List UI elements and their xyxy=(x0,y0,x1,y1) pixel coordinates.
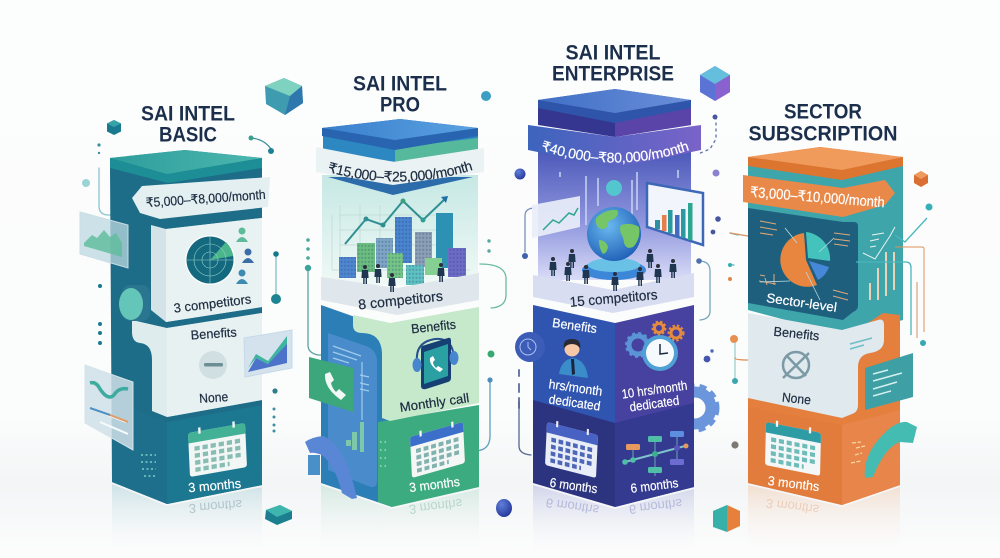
icon: calendar xyxy=(765,419,821,476)
benefits block right face xyxy=(615,305,694,423)
duration labels xyxy=(549,475,680,496)
reflections on floor: 3 months xyxy=(765,496,820,517)
outer trend line xyxy=(895,218,927,242)
monthly call label: Monthly call xyxy=(399,390,470,415)
icon: pie chart xyxy=(780,232,830,287)
lid front xyxy=(322,119,478,150)
reflections on floor xyxy=(112,484,900,558)
hours label right xyxy=(621,378,688,414)
growth line xyxy=(345,196,448,244)
lid lower layer right xyxy=(615,108,691,137)
lid top xyxy=(748,147,903,170)
platform xyxy=(321,273,479,315)
icon: radar xyxy=(185,235,235,285)
column: SAI Intel Enterprise xyxy=(515,89,704,507)
title: Sector Subscription xyxy=(748,100,898,146)
benefits panel xyxy=(748,313,884,418)
dark panel xyxy=(748,208,858,320)
lid front xyxy=(538,89,691,123)
icon: competitor people xyxy=(236,228,254,284)
panel annotations xyxy=(759,221,850,300)
column: SAI Intel Pro xyxy=(305,119,484,507)
hours label left: dedicated xyxy=(548,391,601,414)
price ribbon xyxy=(132,177,270,219)
benefits label: Benefits xyxy=(190,324,238,343)
title: SAI Intel Enterprise: ENTERPRISE xyxy=(552,62,674,86)
bottom block xyxy=(378,405,479,507)
panel connectors xyxy=(760,228,834,300)
price text: ₹5,000–₹8,000/month xyxy=(145,187,266,210)
upper glass body xyxy=(322,175,478,285)
title: SAI Intel Pro xyxy=(353,72,447,116)
icon: calendar xyxy=(545,419,598,478)
title: SAI Intel Basic xyxy=(141,102,235,146)
icon: gears and clock xyxy=(626,322,684,371)
teal side notes xyxy=(850,338,872,349)
sector level label: Sector-level xyxy=(765,290,838,315)
icon: circled x xyxy=(783,352,809,378)
title: SAI Intel Pro: SAI INTEL xyxy=(353,72,447,96)
icon: calendar xyxy=(188,419,247,477)
benefits block left face xyxy=(533,305,615,423)
teal arc xyxy=(865,422,917,478)
chart grid xyxy=(332,205,470,270)
icon: none minus xyxy=(199,351,227,379)
price text: ₹40,000–₹80,000/month xyxy=(542,140,689,164)
right face trend line xyxy=(863,227,895,259)
benefits label: Benefits xyxy=(773,324,821,343)
data streams xyxy=(560,170,678,225)
title: SAI Intel Basic: BASIC xyxy=(159,124,217,146)
side dash notes xyxy=(851,442,865,463)
title: SAI Intel Pro: PRO xyxy=(380,94,420,116)
competitors panel xyxy=(151,218,262,322)
benefits label: Benefits xyxy=(551,315,598,336)
price text: ₹15,000–₹25,000/month xyxy=(329,162,472,184)
reflections on floor: 6 months xyxy=(628,496,683,517)
column: Sector Subscription xyxy=(743,147,932,505)
price ribbon xyxy=(316,147,484,185)
duration label: 3 months xyxy=(408,474,461,495)
competitors label: 8 competitors xyxy=(357,288,444,312)
right face bars xyxy=(870,252,894,300)
cylinder knob xyxy=(119,285,150,321)
people xyxy=(361,263,445,292)
bar chart card xyxy=(647,183,703,245)
icon: calendar xyxy=(410,419,465,478)
benefits panel xyxy=(353,307,479,421)
orange lower body xyxy=(748,313,900,505)
floating circle xyxy=(606,180,622,196)
benefits label: Benefits xyxy=(410,317,457,336)
orange right face shade xyxy=(842,410,900,505)
title: SAI Intel Enterprise xyxy=(552,42,674,86)
hours label left xyxy=(548,376,603,414)
bottom orange block xyxy=(748,407,842,505)
hours label right: 10 hrs/month xyxy=(621,378,688,402)
lid front xyxy=(748,147,903,180)
left blue panel xyxy=(321,305,392,507)
buildings xyxy=(339,213,466,285)
benefits panel right face xyxy=(167,313,262,417)
green phone card xyxy=(309,357,353,412)
reflections on floor: 3 months xyxy=(408,496,463,517)
title: SAI Intel Basic: SAI INTEL xyxy=(141,102,235,126)
column: SAI Intel Basic xyxy=(80,150,292,504)
underside band xyxy=(328,177,473,195)
competitors panel right face xyxy=(166,218,262,322)
lid xyxy=(110,150,262,183)
none label: None xyxy=(199,389,229,406)
outer pipes xyxy=(895,247,924,332)
people xyxy=(549,249,677,291)
benefits panel xyxy=(132,313,262,417)
line chart card xyxy=(532,196,580,238)
title: SAI Intel Enterprise: SAI INTEL xyxy=(566,42,661,64)
dotted speckle xyxy=(141,455,156,476)
dotted speckle xyxy=(380,442,388,466)
price text: ₹3,000–₹10,000/month xyxy=(749,185,885,211)
icon: clock badge xyxy=(515,332,545,362)
glass chart card xyxy=(80,212,128,268)
decorative floating shapes xyxy=(82,66,928,532)
price ribbon xyxy=(528,125,701,168)
lid lower layer xyxy=(323,136,478,162)
lid top xyxy=(110,150,262,174)
platform xyxy=(533,273,694,313)
teal note card xyxy=(865,353,913,410)
title: Sector Subscription: SECTOR xyxy=(784,100,862,124)
hours label left: hrs/month xyxy=(548,376,603,399)
icon: headset phone xyxy=(412,338,458,389)
icon: timeline xyxy=(622,431,688,476)
hours label right: dedicated xyxy=(629,393,680,414)
body back xyxy=(110,168,262,504)
lid top xyxy=(322,119,478,140)
lid lower layer green xyxy=(395,138,478,162)
bottom block right face xyxy=(167,405,262,504)
glass area chart card xyxy=(244,330,292,377)
none label: None xyxy=(781,390,812,407)
competitors label: 3 competitors xyxy=(173,291,253,316)
globe base xyxy=(582,258,646,280)
duration labels: 6 months xyxy=(549,475,599,496)
lid top xyxy=(538,89,691,113)
icon: person xyxy=(559,339,588,378)
price ribbon xyxy=(743,175,895,217)
blue arc xyxy=(305,436,357,499)
icon: large gear xyxy=(673,386,717,430)
duration labels: 6 months xyxy=(630,475,680,496)
upper glass body xyxy=(538,150,691,280)
bottom block right face xyxy=(615,396,694,507)
glass waveform card xyxy=(85,365,133,450)
duration label: 3 months xyxy=(188,476,242,495)
reflections on floor: 6 months xyxy=(545,495,600,518)
bottom block xyxy=(112,400,262,504)
lid lower layer xyxy=(538,108,691,137)
duration label: 3 months xyxy=(767,473,821,494)
connector lines and dots xyxy=(97,114,748,455)
competitors label: 15 competitors xyxy=(569,286,658,310)
bottom block xyxy=(533,396,694,507)
teal body xyxy=(748,166,903,335)
globe xyxy=(587,207,641,261)
blue glass sheet xyxy=(328,333,377,487)
title: Sector Subscription: SUBSCRIPTION xyxy=(748,122,898,146)
reflections on floor: 3 months xyxy=(188,497,243,516)
